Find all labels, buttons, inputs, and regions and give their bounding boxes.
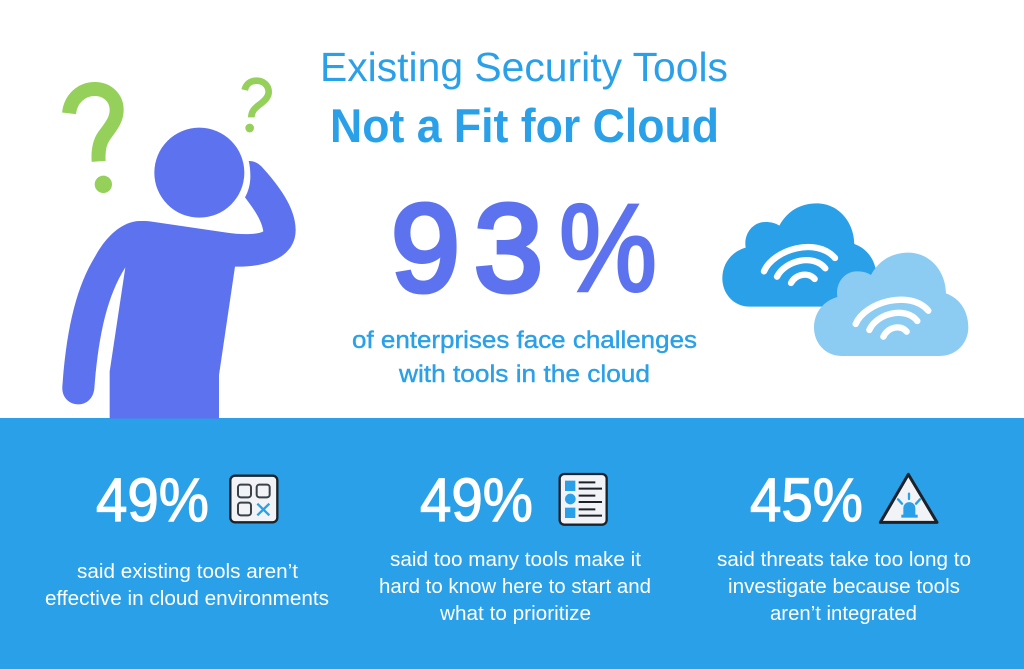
- person head: [154, 128, 244, 218]
- description: [45, 561, 329, 610]
- icon: two wifi clouds: [722, 203, 968, 356]
- icon: alarm warning triangle: [880, 474, 937, 522]
- icon: large question mark: [69, 89, 117, 193]
- description: investigate because tools: [728, 576, 960, 598]
- description: said existing tools aren’t: [77, 561, 298, 583]
- panel: bottom statistics band: [0, 418, 1024, 669]
- title line 1: Existing Security Tools: [320, 44, 728, 90]
- description: [379, 549, 651, 625]
- dark blue cloud: [722, 203, 877, 307]
- main statistic caption: with tools in the cloud: [398, 361, 650, 388]
- stat: 49%: 49%: [420, 466, 533, 534]
- person body: [62, 161, 296, 419]
- column 3: slow investigation: [717, 466, 971, 625]
- main statistic: 93%: %: [559, 180, 657, 318]
- stat: 45%: 45%: [750, 466, 863, 534]
- icon: small question mark: [245, 81, 269, 132]
- column 2: too many tools: [379, 466, 651, 625]
- icon: thinking person with question marks: [62, 81, 296, 419]
- stat: 49%: 49%: [96, 466, 209, 534]
- title line 2: Not a Fit for Cloud: [330, 99, 719, 152]
- main statistic: 93%: 9: [391, 180, 460, 318]
- description: [717, 549, 971, 625]
- title: [320, 44, 728, 152]
- main statistic caption: [352, 327, 697, 388]
- description: aren’t integrated: [770, 603, 917, 625]
- column 1: ineffective tools: [45, 466, 329, 610]
- description: said too many tools make it: [390, 549, 641, 571]
- icon: checklist: [560, 474, 607, 525]
- description: effective in cloud environments: [45, 588, 329, 610]
- main statistic: 93%: [391, 180, 657, 318]
- description: what to prioritize: [439, 603, 591, 625]
- main statistic: 93%: 3: [474, 180, 543, 318]
- description: said threats take too long to: [717, 549, 971, 571]
- description: hard to know here to start and: [379, 576, 651, 598]
- main statistic caption: of enterprises face challenges: [352, 327, 697, 354]
- icon: grid with x: [230, 476, 277, 522]
- light blue cloud: [814, 253, 968, 356]
